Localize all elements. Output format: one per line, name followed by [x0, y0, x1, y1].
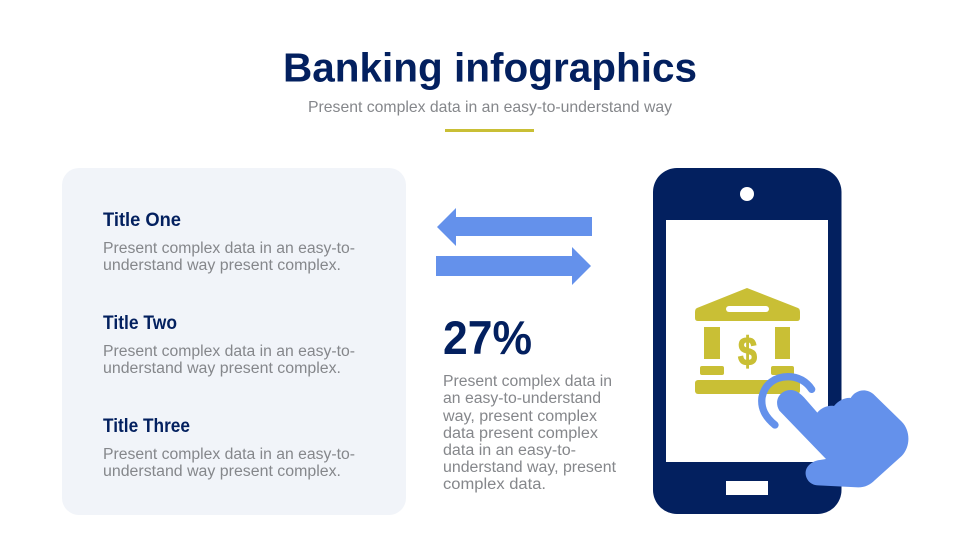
item: title two: understand way present complex. [103, 360, 341, 377]
subtitle: Present complex data in an easy-to-understand way [308, 99, 672, 116]
title underline [445, 129, 534, 132]
arrow: right [436, 247, 591, 285]
item: title one: Present complex data in an easy-to- [103, 240, 355, 257]
statistic description: Present complex data in [443, 373, 612, 390]
statistic description: way, present complex [442, 408, 597, 425]
item: title three [103, 416, 355, 480]
statistic description: data present complex [443, 425, 598, 442]
arrow: left [437, 208, 592, 246]
statistic description [442, 373, 617, 493]
item: title two: Title Two [103, 313, 177, 334]
statistic description: understand way, present [443, 459, 617, 476]
title: Banking infographics [283, 44, 697, 90]
statistic description: an easy-to-understand [443, 390, 601, 407]
item: title two: Present complex data in an easy-to- [103, 343, 355, 360]
item: title one [103, 210, 355, 274]
panel: titles list [62, 168, 406, 515]
item: title three: Present complex data in an easy-to- [103, 446, 355, 463]
icon: smartphone [653, 168, 842, 514]
icon: tapping hand [762, 377, 908, 487]
item: title three: Title Three [103, 416, 190, 437]
statistic description: data in an easy-to- [443, 442, 576, 459]
item: title one: Title One [103, 210, 181, 231]
item: title three: understand way present complex. [103, 463, 341, 480]
icon: bank building [695, 288, 800, 394]
item: title one: understand way present complex. [103, 257, 341, 274]
item: title two [103, 313, 355, 377]
icon: bank building: $ [738, 330, 757, 374]
statistic description: complex data. [443, 476, 546, 493]
statistic: 27%: 27% [443, 311, 532, 364]
